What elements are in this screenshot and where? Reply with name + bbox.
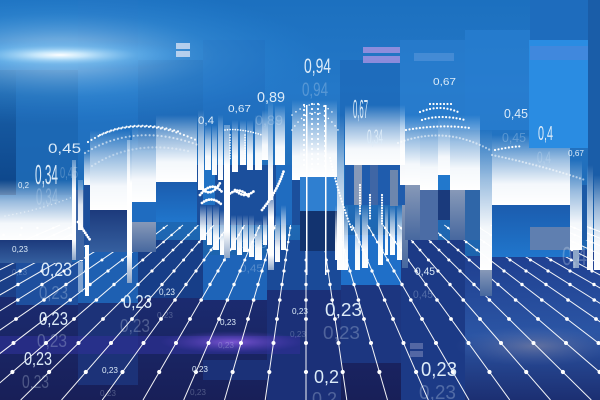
data numbers: 0,2	[314, 367, 339, 387]
bright blue panel	[529, 40, 588, 148]
ghost reflected numbers: 0,23	[12, 268, 28, 277]
data numbers: 0,67	[353, 94, 368, 124]
data numbers: 0,67	[568, 149, 585, 158]
data numbers: 0,23	[325, 300, 362, 320]
data numbers: 0,23	[292, 307, 309, 316]
skyline centre-right columns	[335, 105, 480, 270]
ghost reflected numbers: 0,23	[39, 283, 68, 303]
ghost reflected numbers: 0,23	[190, 388, 207, 397]
data numbers: 0,89	[257, 89, 285, 106]
data numbers: 0,23	[41, 260, 72, 281]
ghost reflected numbers	[12, 80, 587, 400]
dot dome centre	[292, 104, 352, 230]
data numbers: 0,23	[192, 365, 209, 374]
skyline right columns	[480, 130, 600, 296]
data numbers: 0,4	[198, 115, 214, 127]
ghost reflected numbers: 0,4	[562, 241, 587, 271]
ghost reflected numbers: 0,23	[218, 341, 235, 350]
data numbers: 0,45	[415, 266, 435, 278]
ghost reflected numbers: 0,94	[302, 80, 328, 101]
data numbers: 0,23	[24, 349, 52, 369]
warm light glow on floor	[455, 326, 600, 366]
data numbers: 0,45	[48, 140, 81, 156]
data numbers: 0,67	[433, 77, 457, 88]
ghost reflected numbers: 0,45	[237, 239, 267, 251]
skyline left block	[0, 115, 197, 296]
ghost reflected numbers: 0,45	[60, 165, 78, 182]
ghost reflected numbers: 0,45	[413, 289, 433, 301]
dot splatter mid	[78, 130, 382, 240]
data numbers: 0,23	[123, 292, 152, 312]
ghost reflected numbers: 0,89	[255, 112, 283, 128]
data numbers: 0,23	[220, 318, 237, 327]
data numbers: 0,23	[159, 287, 175, 297]
data numbers	[12, 55, 585, 387]
ghost reflected numbers: 0,23	[157, 311, 174, 320]
lens flare top left	[0, 0, 320, 125]
data numbers: 0,2	[18, 181, 30, 190]
dot dome right	[398, 104, 585, 180]
data numbers: 0,23	[12, 245, 29, 254]
data numbers: 0,23	[102, 366, 119, 375]
ghost reflected numbers: 0,45	[502, 130, 526, 145]
sky background with vertical panels	[0, 0, 600, 300]
ghost reflected numbers: 0,23	[37, 331, 67, 351]
data numbers: 0,34	[367, 126, 383, 149]
ghost reflected numbers: 0,23	[100, 389, 117, 398]
dot dome left	[5, 126, 198, 216]
ghost reflected numbers: 0,23	[22, 372, 49, 392]
ghost reflected numbers: 0,34	[36, 184, 58, 211]
ghost reflected numbers: 0,23	[120, 316, 150, 336]
floor panels	[0, 235, 600, 400]
grid intersection dots	[0, 228, 600, 372]
data numbers: 0,45	[504, 106, 528, 121]
ghost reflected numbers: 0,23	[290, 330, 307, 339]
data numbers: 0,23	[421, 359, 457, 381]
ghost reflected numbers: 0,45	[240, 263, 263, 275]
purple light glow on floor	[160, 331, 304, 353]
light bars top	[176, 43, 588, 357]
data numbers: 0,34	[35, 159, 58, 190]
data numbers: 0,94	[304, 55, 331, 78]
perspective grid lines	[0, 225, 600, 400]
data numbers: 0,4	[538, 123, 553, 145]
skyline middle columns	[197, 100, 337, 275]
data numbers: 0,67	[228, 104, 252, 115]
ghost reflected numbers: 0,23	[323, 323, 360, 343]
data numbers: 0,23	[39, 309, 68, 329]
ghost reflected numbers: 0,4	[537, 148, 551, 167]
